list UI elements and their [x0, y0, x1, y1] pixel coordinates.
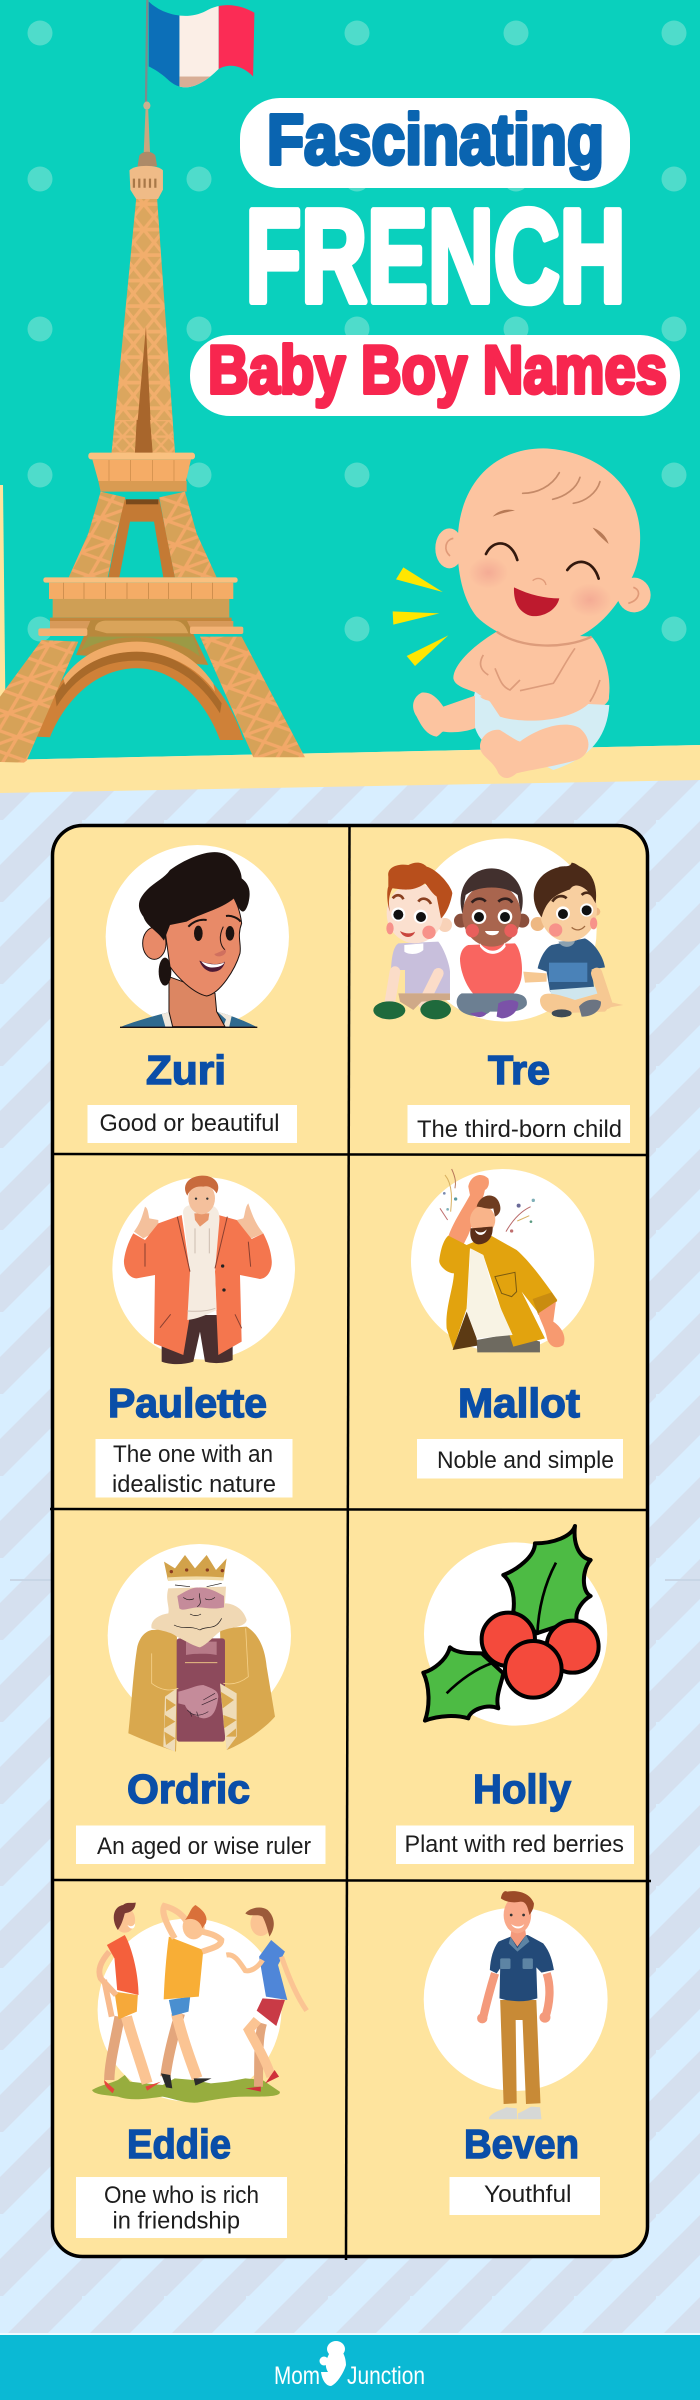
MomJunction logo: Junction [347, 2362, 425, 2390]
robe [128, 1628, 178, 1752]
card: Tre [373, 838, 630, 1143]
card: Beven [424, 1891, 608, 2215]
trousers [500, 2000, 540, 2104]
tower upper shaft [112, 102, 175, 453]
name: Holly: Holly [473, 1766, 571, 1812]
rays [393, 567, 448, 666]
arch spandrel [76, 620, 208, 665]
card: Zuri [88, 845, 297, 1143]
title [190, 98, 680, 416]
left friend [99, 1903, 161, 2093]
meaning: Paulette [96, 1439, 292, 1498]
icon: laughing baby [393, 448, 651, 778]
name: Ordric: Ordric [127, 1766, 250, 1812]
meaning: Holly [396, 1826, 634, 1864]
meaning: Eddie: One who is rich [104, 2182, 259, 2209]
meaning: Zuri [88, 1105, 297, 1143]
middle friend [161, 1905, 221, 2088]
logo icon: mother and child [320, 2341, 346, 2386]
meaning: Ordric [76, 1826, 326, 1864]
coat [124, 1215, 190, 1355]
name: Eddie: Eddie [127, 2121, 231, 2167]
right friend [226, 1908, 307, 2092]
MomJunction logo [274, 2341, 425, 2390]
meaning: Tre [408, 1105, 630, 1143]
baby body [453, 632, 609, 724]
tunic [177, 1638, 225, 1742]
face [177, 1588, 224, 1610]
lower arm [538, 1302, 565, 1347]
arm hands [178, 1685, 218, 1718]
card: Holly [396, 1526, 634, 1864]
neck and head [511, 1923, 526, 1947]
meaning: Holly: Plant with red berries [404, 1831, 624, 1858]
ears [435, 528, 463, 568]
card: Paulette [96, 1176, 295, 1498]
icon: three seated boys [373, 838, 623, 1022]
icon: holly leaves and berries [423, 1526, 607, 1726]
hoodie [183, 1205, 219, 1320]
name: Beven: Beven [464, 2121, 579, 2167]
tower lower structure [0, 420, 305, 763]
trousers [162, 1315, 233, 1364]
card: Ordric [76, 1544, 326, 1864]
confetti [440, 1169, 531, 1232]
logo wordmark: Mom [274, 2362, 320, 2390]
middle legs [108, 499, 175, 577]
robe trim [163, 1688, 177, 1752]
shirt [467, 1248, 513, 1338]
meaning: Eddie: in friendship [112, 2208, 240, 2234]
name: Tre: Tre [488, 1047, 550, 1093]
icon: old king [108, 1544, 291, 1752]
arch [35, 642, 243, 740]
striped page background [0, 780, 700, 2400]
cheeks [468, 557, 508, 589]
thumbs [134, 1207, 158, 1238]
card: Eddie [76, 1903, 307, 2238]
raised arm [448, 1175, 489, 1245]
eyes [486, 543, 599, 579]
icon: French flag on pole [146, 0, 255, 102]
near leg and foot [413, 693, 475, 737]
meaning: Tre: The third-born child [417, 1116, 622, 1143]
arms [483, 1973, 549, 2018]
crown [164, 1555, 227, 1581]
first platform [43, 577, 238, 583]
name: Mallot: Mallot [458, 1380, 580, 1426]
card: Mallot [411, 1169, 623, 1478]
panel: names grid [50, 826, 651, 2260]
hands [480, 690, 537, 716]
shoes [489, 2107, 541, 2119]
footer band [0, 2333, 700, 2400]
polka dots [28, 20, 686, 642]
meaning: Mallot: Noble and simple [437, 1447, 614, 1474]
meaning: Zuri: Good or beautiful [100, 1110, 280, 1137]
title pill: Fascinating: Fascinating [267, 101, 604, 180]
icon: cheering bearded man [411, 1169, 594, 1352]
meaning: Mallot [417, 1439, 623, 1478]
boy one [373, 863, 452, 1019]
icon: standing young man [424, 1891, 608, 2119]
meaning: Beven [450, 2177, 600, 2215]
name: Paulette: Paulette [108, 1380, 267, 1426]
boy two [454, 868, 529, 1018]
meaning: Beven: Youthful [484, 2181, 572, 2208]
big legs [0, 640, 78, 763]
hair and brows [523, 473, 600, 503]
meaning: Eddie [76, 2177, 287, 2238]
boy three [523, 863, 623, 1017]
icon: Zuri portrait [106, 845, 289, 1047]
name: Zuri: Zuri [146, 1047, 226, 1093]
grass [92, 2075, 280, 2103]
head [458, 448, 640, 645]
pants [477, 1333, 540, 1352]
jacket [439, 1235, 557, 1349]
icon: three friends on grass [92, 1903, 307, 2103]
meaning: Paulette: idealistic nature [112, 1471, 276, 1498]
header panel [0, 0, 700, 793]
nose and mouth [533, 578, 546, 585]
meaning: Ordric: An aged or wise ruler [97, 1833, 311, 1860]
beard [151, 1587, 247, 1647]
head [194, 1213, 209, 1227]
diaper [472, 692, 609, 770]
head [470, 1206, 495, 1234]
icon: man in orange coat [112, 1176, 295, 1364]
icon: Eiffel Tower [0, 102, 305, 763]
meaning: Paulette: The one with an [113, 1441, 273, 1468]
shirt [490, 1935, 554, 2001]
